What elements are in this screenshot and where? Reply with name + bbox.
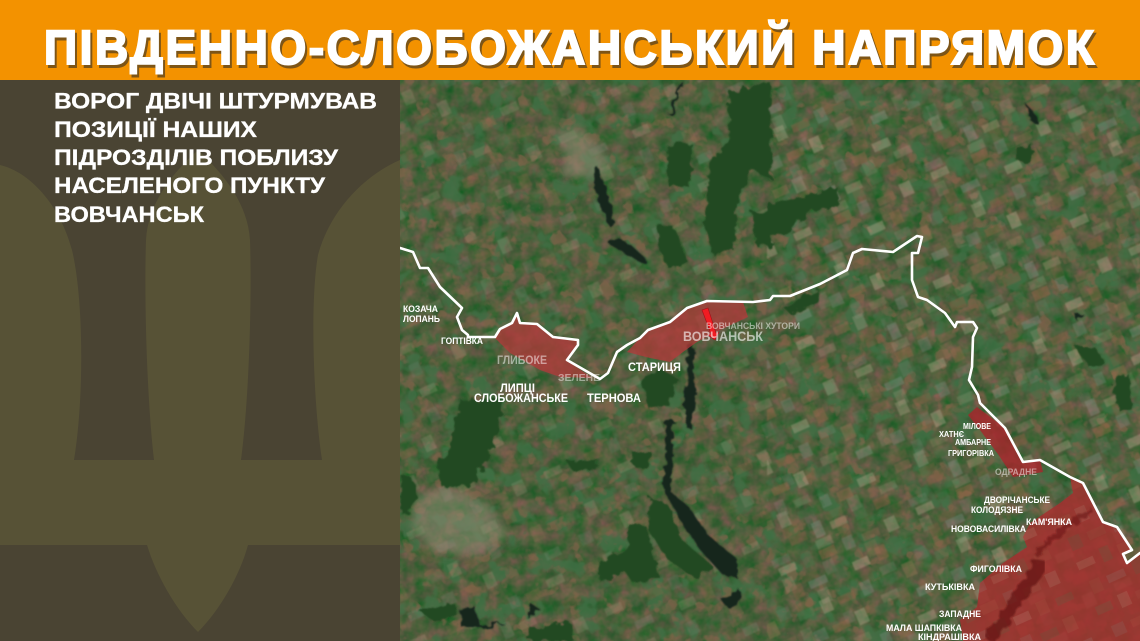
map place labels: ВОВЧАНСЬКІ ХУТОРИ [706, 321, 800, 331]
map place labels: АМБАРНЕ [955, 438, 992, 447]
title: ПІВДЕННО-СЛОБОЖАНСЬКИЙ НАПРЯМОК [46, 24, 1096, 77]
front line [400, 236, 1140, 563]
map background [400, 80, 1140, 641]
rivers and reservoirs [460, 82, 1086, 631]
map place labels: ХАТНЄ [939, 430, 964, 439]
occupied area: south-east [960, 477, 1140, 641]
panel text: ПІДРОЗДІЛІВ ПОБЛИЗУ [54, 145, 338, 170]
map place labels: ГЛИБОКЕ [497, 353, 547, 367]
towns [413, 128, 612, 556]
map place labels: СЛОБОЖАНСЬКЕ [474, 391, 568, 405]
map place labels: НОВОВАСИЛІВКА [951, 524, 1026, 534]
map place labels: ГОПТІВКА [441, 336, 483, 346]
occupied area: Hlyboke [495, 313, 592, 378]
forests [400, 82, 1132, 641]
map place labels: ТЕРНОВА [587, 391, 641, 405]
map place labels [403, 304, 1072, 641]
occupied area: Milove [968, 407, 1043, 477]
panel text [54, 88, 377, 227]
occupied area: Vovchansk [627, 301, 748, 362]
map place labels: МІЛОВЕ [963, 422, 992, 431]
panel text: ПОЗИЦІЇ НАШИХ [54, 117, 257, 142]
map place labels: ФИГОЛІВКА [970, 564, 1022, 574]
header banner [0, 0, 1140, 80]
left panel [0, 80, 400, 641]
panel text: НАСЕЛЕНОГО ПУНКТУ [54, 173, 325, 198]
map place labels: ЗАПАДНЕ [939, 609, 981, 619]
map place labels: КАМ'ЯНКА [1026, 517, 1072, 527]
map place labels: ОДРАДНЕ [995, 467, 1037, 477]
map place labels: ЛОПАНЬ [403, 314, 440, 324]
map place labels: КОЗАЧА [403, 304, 438, 314]
panel text: ВОВЧАНСЬК [54, 202, 205, 227]
red direction arrow [702, 308, 719, 340]
trident emblem watermark [0, 150, 400, 632]
map place labels: ГРИГОРІВКА [948, 449, 994, 458]
map place labels: КУТЬКІВКА [925, 582, 975, 592]
map place labels: СТАРИЦЯ [628, 360, 681, 374]
map place labels: КОЛОДЯЗНЕ [971, 505, 1023, 515]
map place labels: ДВОРІЧАНСЬКЕ [984, 495, 1050, 505]
panel text: ВОРОГ ДВІЧІ ШТУРМУВАВ [54, 88, 377, 114]
map place labels: ВОВЧАНСЬК [683, 328, 763, 344]
title: ПІВДЕННО-СЛОБОЖАНСЬКИЙ НАПРЯМОК [44, 21, 1094, 74]
map place labels: ЗЕЛЕНЕ [558, 373, 600, 384]
map place labels: ЛИПЦІ [500, 381, 535, 395]
map place labels: МАЛА ШАПКІВКА [886, 623, 962, 633]
